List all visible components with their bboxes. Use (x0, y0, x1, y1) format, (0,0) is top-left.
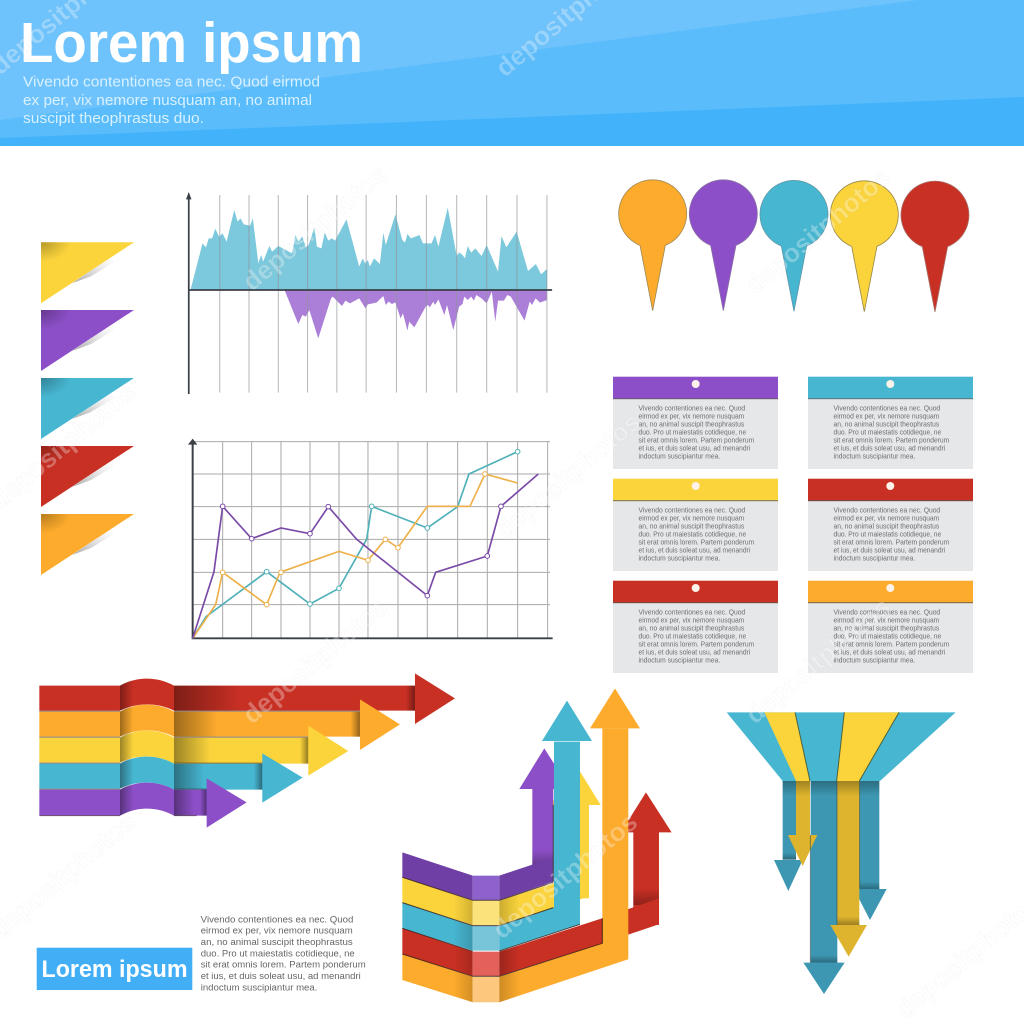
bottom paragraph: indoctum suscipiantur mea. (201, 982, 317, 993)
card: teal: indoctum suscipiantur mea. (834, 451, 915, 460)
card: purple: an, no animal suscipit theophrastus (638, 420, 744, 429)
bottom label: Lorem ipsum (42, 956, 188, 983)
arrow: yellow (39, 726, 348, 776)
card: red lower: indoctum suscipiantur mea. (638, 655, 720, 664)
card: red lower: et ius, et duis soleat usu, ad menandri (638, 647, 751, 656)
arrow: purple (39, 778, 247, 828)
card: yellow (613, 479, 778, 571)
watermarks: depositphotos (237, 158, 393, 297)
bottom paragraph: et ius, et duis soleat usu, ad menandri (201, 971, 361, 982)
card: teal: an, no animal suscipit theophrastus (834, 420, 939, 429)
card: orange: indoctum suscipiantur mea. (834, 655, 915, 664)
watermarks: depositphotos (740, 161, 896, 300)
band: orange with up arrow (402, 688, 640, 1002)
header banner (0, 0, 1024, 146)
series: purple line (193, 474, 538, 638)
watermarks: depositphotos (490, 406, 646, 545)
arrow: red up (621, 792, 672, 925)
arrow: teal center (803, 781, 845, 994)
card: orange: et ius, et duis soleat usu, ad menandri (834, 647, 946, 656)
bottom label (37, 948, 192, 990)
bottom paragraph (201, 914, 366, 993)
watermarks: depositphotos (237, 591, 393, 730)
card: yellow: sit erat omnis lorem. Partem ponderum (638, 537, 754, 546)
card: red lower: Vivendo contentiones ea nec. Quod (638, 608, 745, 617)
arrow: yellow up (551, 764, 601, 898)
header subtitle: suscipit theophrastus duo. (23, 110, 204, 127)
card: purple: et ius, et duis soleat usu, ad menandri (638, 443, 751, 452)
card: purple: indoctum suscipiantur mea. (638, 451, 720, 460)
card: purple: duo. Pro ut maiestatis cotidieque, ne (638, 428, 746, 436)
card: teal: et ius, et duis soleat usu, ad menandri (834, 443, 946, 452)
header subtitle (23, 74, 320, 127)
card: teal: sit erat omnis lorem. Partem ponderum (834, 435, 949, 444)
chart axes (188, 439, 553, 639)
card: teal: duo. Pro ut maiestatis cotidieque, ne (834, 428, 941, 436)
card: purple (613, 377, 778, 469)
card: red lower: duo. Pro ut maiestatis cotidieque, ne (638, 632, 746, 640)
arrow: teal (39, 753, 303, 803)
arrow: red (39, 673, 455, 724)
info cards (613, 377, 973, 673)
card: red lower (613, 581, 778, 673)
card: orange: duo. Pro ut maiestatis cotidieque, ne (834, 632, 941, 640)
card: red: an, no animal suscipit theophrastus (834, 522, 939, 531)
area chart (186, 192, 552, 394)
card: yellow: an, no animal suscipit theophrastus (638, 522, 744, 531)
series: orange line (193, 472, 518, 638)
map pins (619, 180, 969, 312)
card: red lower: sit erat omnis lorem. Partem ponderum (638, 639, 754, 648)
flag: yellow (41, 242, 134, 303)
flag: red (41, 446, 134, 507)
arrow: orange (39, 699, 400, 750)
upward folded arrows (402, 688, 672, 1002)
band: red (402, 898, 659, 976)
flag: purple (41, 310, 134, 371)
header subtitle: ex per, vix nemore nusquam an, no animal (23, 92, 312, 109)
card: yellow: eirmod ex per, vix nemore nusquam (638, 514, 744, 523)
card: red: indoctum suscipiantur mea. (834, 553, 915, 562)
band: purple (402, 852, 553, 900)
band: yellow (402, 871, 589, 926)
card: red: eirmod ex per, vix nemore nusquam (834, 514, 939, 523)
arrow: teal right (854, 781, 887, 920)
pin: yellow (830, 181, 898, 312)
title: Lorem ipsum (20, 11, 363, 75)
card: yellow: et ius, et duis soleat usu, ad menandri (638, 545, 751, 554)
pin: purple (689, 180, 757, 311)
card: red (808, 479, 973, 571)
arrow: purple up (519, 748, 570, 869)
pin: red (901, 181, 969, 312)
funnel top (727, 712, 956, 781)
arrow: yellow left (788, 781, 817, 866)
watermarks: depositphotos (740, 591, 896, 730)
card: yellow: Vivendo contentiones ea nec. Quod (638, 506, 745, 515)
bottom paragraph: eirmod ex per, vix nemore nusquam (201, 926, 353, 937)
pin: teal (760, 180, 828, 311)
card: red: Vivendo contentiones ea nec. Quod (834, 506, 940, 515)
horizontal ribbon arrows (39, 673, 455, 828)
card: orange: an, no animal suscipit theophrastus (834, 624, 939, 633)
card: orange: Vivendo contentiones ea nec. Quod (834, 608, 940, 617)
card: red: duo. Pro ut maiestatis cotidieque, ne (834, 530, 941, 538)
card: purple: eirmod ex per, vix nemore nusquam (638, 412, 744, 421)
card: purple: Vivendo contentiones ea nec. Quod (638, 404, 745, 413)
card: purple: sit erat omnis lorem. Partem ponderum (638, 435, 754, 444)
flag: orange (41, 514, 134, 575)
bottom paragraph: Vivendo contentiones ea nec. Quod (201, 914, 353, 925)
card: teal: eirmod ex per, vix nemore nusquam (834, 412, 939, 421)
card: red lower: an, no animal suscipit theophrastus (638, 624, 744, 633)
band: teal with up arrow (402, 701, 592, 951)
card: orange (808, 581, 973, 673)
chart axes (186, 192, 552, 394)
card: orange: sit erat omnis lorem. Partem ponderum (834, 639, 949, 648)
corner flags (41, 242, 134, 575)
card: red: et ius, et duis soleat usu, ad menandri (834, 545, 946, 554)
line chart (188, 439, 553, 639)
bottom paragraph: sit erat omnis lorem. Partem ponderum (201, 960, 366, 971)
arrow: teal left (774, 781, 803, 891)
bottom paragraph: duo. Pro ut maiestatis cotidieque, ne (201, 948, 355, 959)
positive area series (190, 208, 547, 290)
card: red: sit erat omnis lorem. Partem ponderum (834, 537, 949, 546)
header subtitle: Vivendo contentiones ea nec. Quod eirmod (23, 74, 320, 90)
arrow: yellow right (810, 781, 867, 963)
card: teal (808, 377, 973, 469)
negative area series (284, 290, 547, 338)
pin: orange (619, 180, 687, 311)
card: red lower: eirmod ex per, vix nemore nusquam (638, 616, 744, 625)
flag: teal (41, 378, 134, 439)
card: orange: eirmod ex per, vix nemore nusquam (834, 616, 939, 625)
card: yellow: indoctum suscipiantur mea. (638, 553, 720, 562)
bottom paragraph: an, no animal suscipit theophrastus (201, 937, 353, 948)
card: yellow: duo. Pro ut maiestatis cotidieque, ne (638, 530, 746, 538)
watermarks: depositphotos (487, 806, 643, 945)
series: teal line (193, 449, 520, 638)
funnel with down arrows (727, 712, 956, 994)
card: teal: Vivendo contentiones ea nec. Quod (834, 404, 940, 413)
